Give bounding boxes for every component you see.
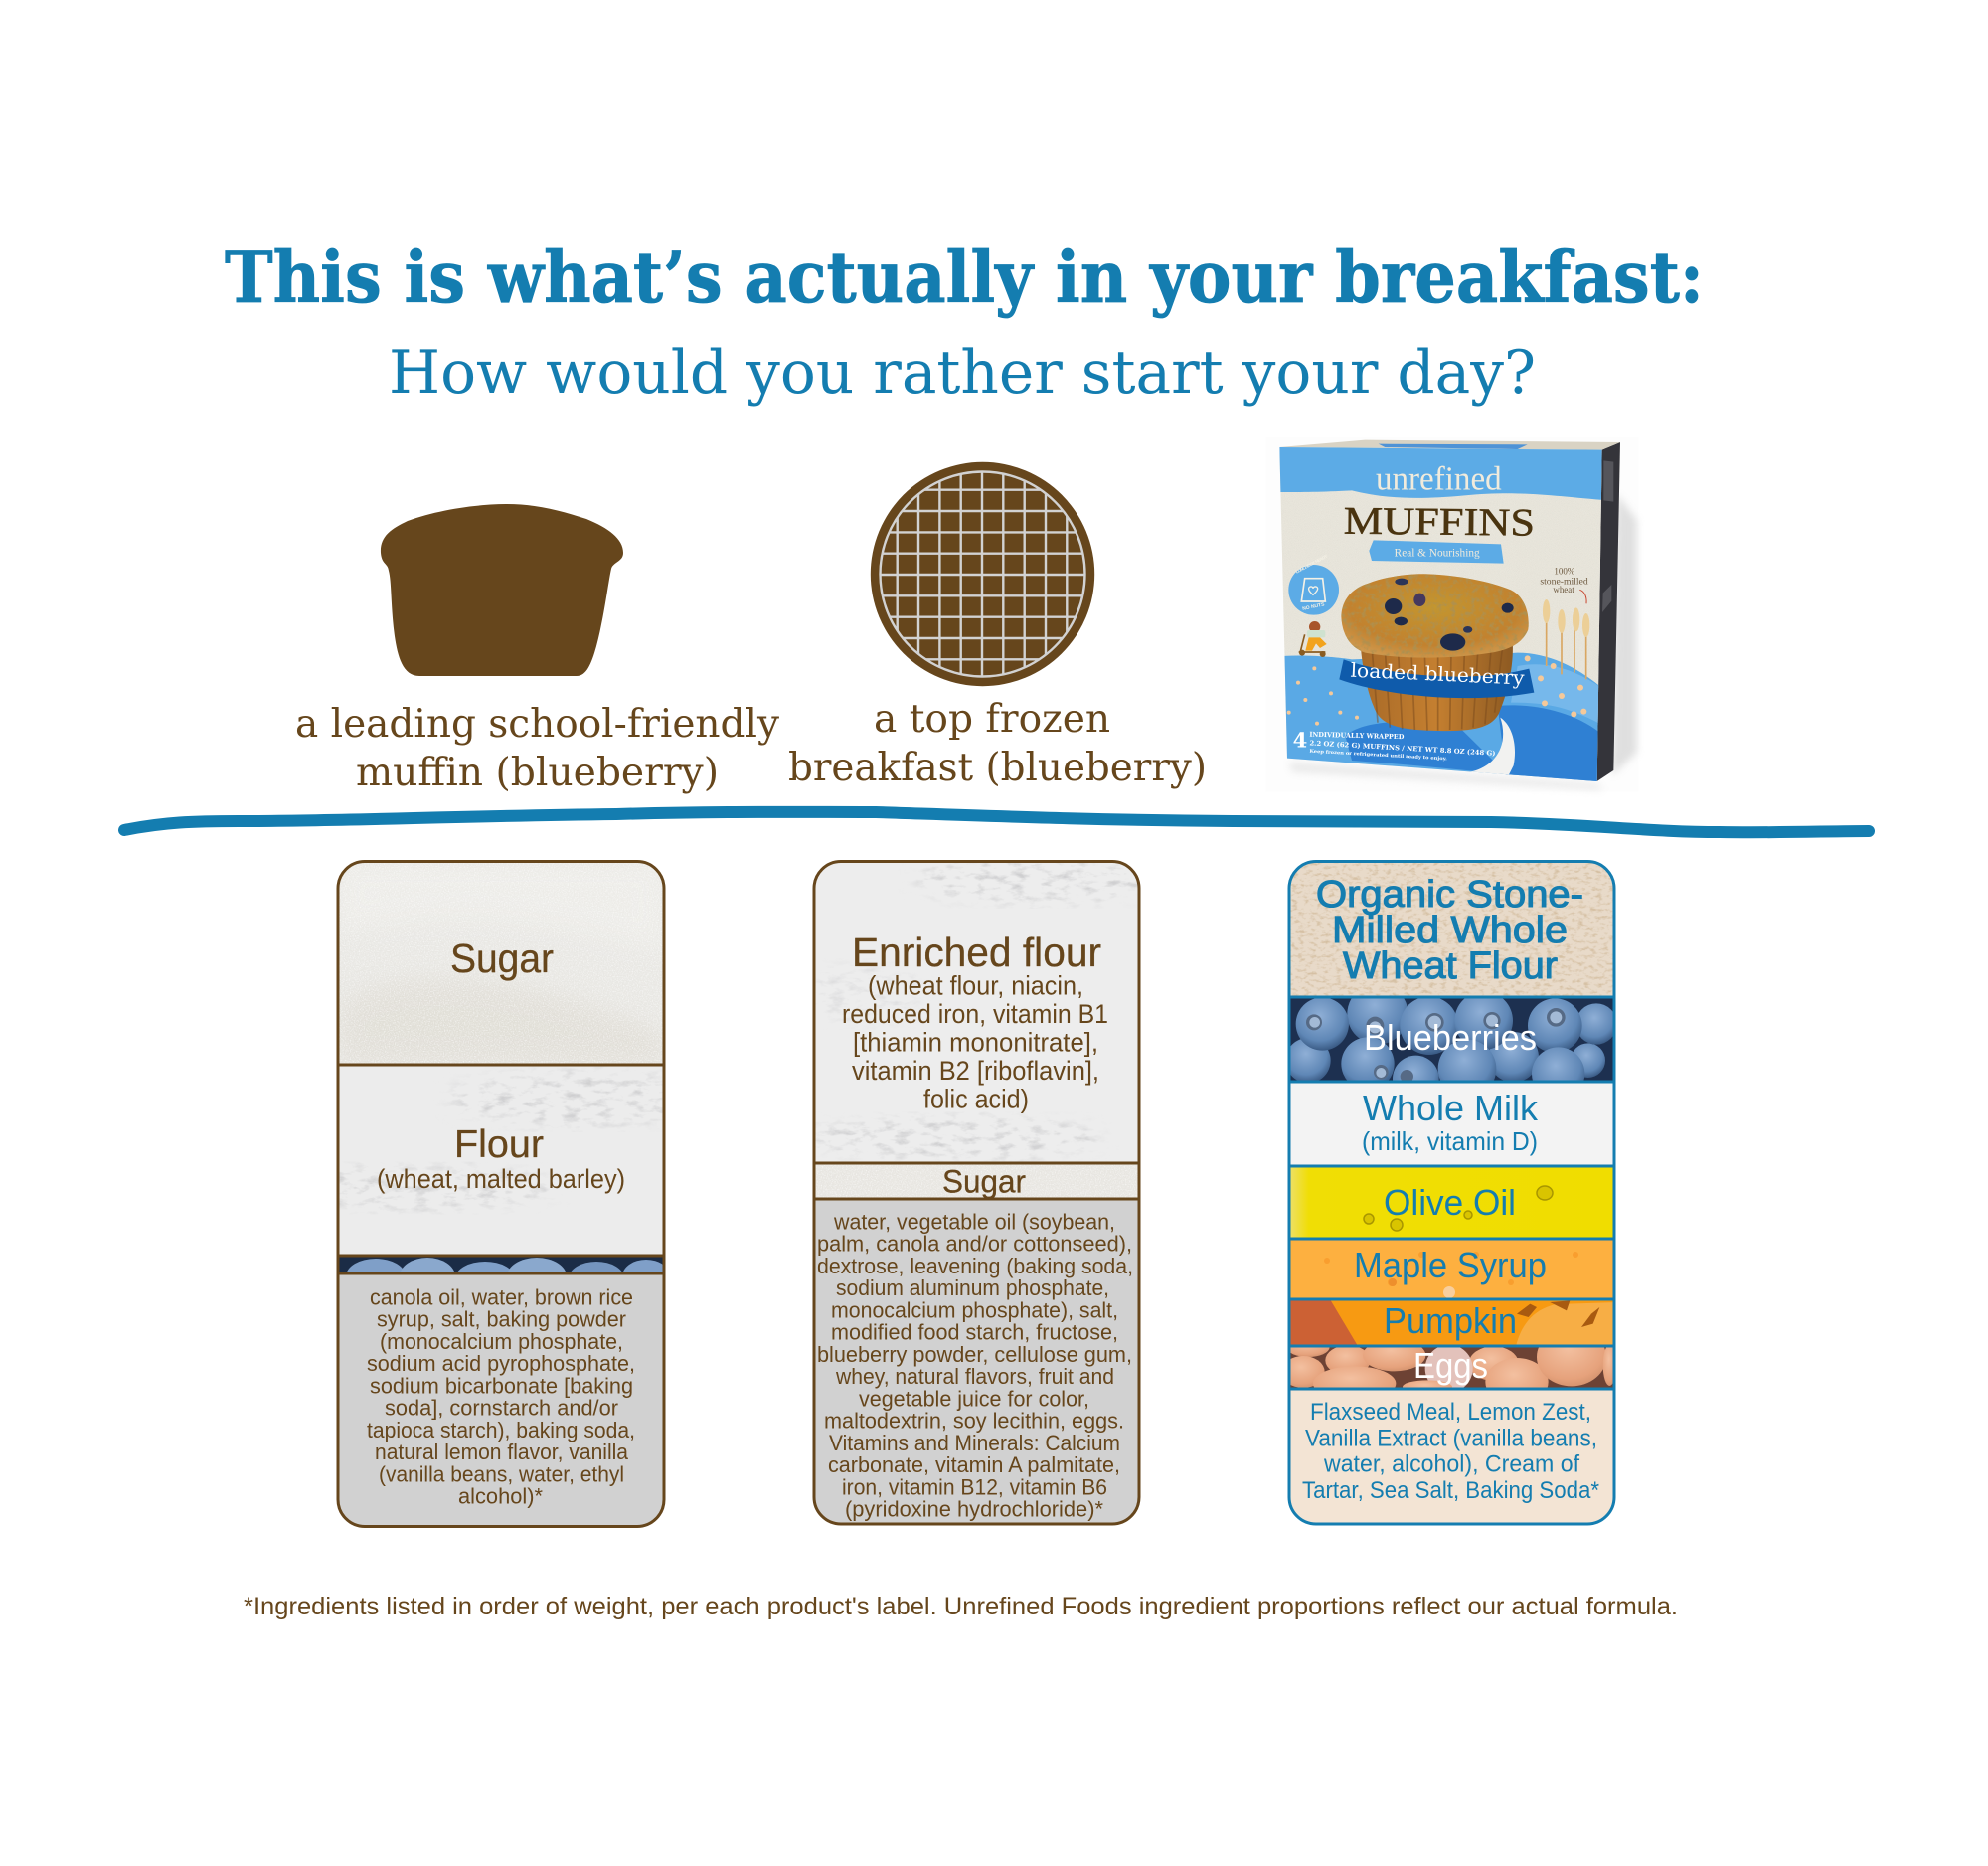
layer: other ingredients: (monocalcium phosphate, bbox=[380, 1329, 623, 1354]
layer: whole milk bbox=[1289, 1082, 1616, 1166]
layer: enriched flour: folic acid) bbox=[923, 1084, 1029, 1113]
layer: other ingredients: sodium aluminum phosphate, bbox=[836, 1275, 1109, 1300]
layer: whole wheat flour: Organic Stone- bbox=[1316, 874, 1583, 916]
layer: other ingredients: vegetable juice for color, bbox=[859, 1386, 1089, 1411]
layer: other ingredients: Flaxseed Meal, Lemon Zest, bbox=[1310, 1399, 1591, 1426]
box pack size text: 2.2 OZ (62 G) MUFFINS / NET WT 8.8 OZ (248 G) bbox=[1309, 739, 1496, 758]
layer: whole wheat flour: Wheat Flour bbox=[1343, 945, 1558, 987]
product box: unrefined muffins bbox=[1265, 437, 1638, 792]
layer: other ingredients: modified food starch, fructose, bbox=[831, 1320, 1118, 1345]
layer: other ingredients: tapioca starch), baking soda, bbox=[367, 1418, 635, 1442]
panel: frozen breakfast ingredients bbox=[805, 856, 1153, 1529]
box badge: lunchbox ready bbox=[1288, 553, 1339, 615]
panel: leading muffin ingredients bbox=[336, 860, 666, 1528]
layer: sugar bbox=[338, 861, 665, 1065]
layer: enriched flour: Enriched flour bbox=[852, 930, 1101, 975]
layer: flour bbox=[340, 1066, 662, 1255]
layer: other ingredients: carbonate, vitamin A palmitate, bbox=[828, 1452, 1120, 1477]
icon: muffin silhouette bbox=[381, 504, 623, 676]
layer: whole wheat flour bbox=[1289, 861, 1616, 997]
box pack size text: Keep frozen or refrigerated until ready to enjoy. bbox=[1309, 749, 1447, 762]
layer: other ingredients bbox=[338, 1273, 665, 1532]
subtitle: How would you rather start your day? bbox=[389, 338, 1536, 408]
layer: other ingredients bbox=[814, 1199, 1141, 1529]
layer: whole milk: Whole Milk bbox=[1363, 1088, 1539, 1128]
layer: maple syrup bbox=[1289, 1239, 1616, 1299]
box badge: lunchbox ready: LUNCHBOX READY bbox=[1295, 553, 1328, 575]
layer: other ingredients: alcohol)* bbox=[458, 1483, 543, 1509]
label: frozen breakfast: breakfast (blueberry) bbox=[788, 746, 1207, 790]
layer: enriched flour bbox=[805, 856, 1153, 1163]
box pack size text: 4 bbox=[1293, 729, 1307, 753]
label: frozen breakfast: a top frozen bbox=[874, 697, 1110, 742]
layer: other ingredients: Vitamins and Minerals: Calcium bbox=[829, 1431, 1120, 1455]
box brand name: unrefined bbox=[1376, 461, 1502, 498]
layer: eggs: Eggs bbox=[1413, 1345, 1488, 1386]
layer: other ingredients: palm, canola and/or cottonseed), bbox=[817, 1232, 1132, 1257]
layer: other ingredients bbox=[1289, 1389, 1616, 1528]
layer: other ingredients: dextrose, leavening (baking soda, bbox=[817, 1254, 1133, 1278]
layer: other ingredients: water, vegetable oil (soybean, bbox=[833, 1209, 1115, 1234]
label: frozen breakfast bbox=[788, 697, 1207, 790]
layer: other ingredients: (vanilla beans, water, ethyl bbox=[379, 1461, 624, 1486]
panel: unrefined muffin ingredients bbox=[1281, 861, 1617, 1528]
layer: other ingredients: maltodextrin, soy lecithin, eggs. bbox=[824, 1409, 1124, 1434]
box band: loaded blueberry: loaded blueberry bbox=[1350, 659, 1525, 690]
layer: other ingredients: sodium bicarbonate [baking bbox=[370, 1373, 633, 1398]
layer: blueberries bbox=[1290, 998, 1612, 1080]
layer: enriched flour: vitamin B2 [riboflavin], bbox=[852, 1056, 1099, 1086]
box band: loaded blueberry bbox=[1339, 659, 1534, 698]
dark blue water bbox=[1345, 722, 1508, 774]
layer: flour: (wheat, malted barley) bbox=[377, 1164, 625, 1194]
box callout: stone-milled wheat: stone-milled bbox=[1540, 576, 1588, 586]
box illustration: child on scooter bbox=[1299, 621, 1327, 657]
layer: other ingredients: Tartar, Sea Salt, Baking Soda* bbox=[1302, 1477, 1599, 1504]
box scattered wheat marks bbox=[1287, 655, 1586, 726]
lower hills bbox=[1282, 653, 1603, 788]
icon: waffle bbox=[865, 457, 1098, 691]
layer: other ingredients: water, alcohol), Cream of bbox=[1323, 1451, 1579, 1478]
layer: blueberries strip bbox=[340, 1257, 662, 1272]
box badge: lunchbox ready: NO NUTS bbox=[1302, 601, 1326, 612]
layer: other ingredients: blueberry powder, cellulose gum, bbox=[817, 1342, 1132, 1367]
label: school-friendly muffin: a leading school-friendly bbox=[295, 702, 779, 747]
layer: sugar: Sugar bbox=[942, 1164, 1026, 1200]
wavy divider bbox=[124, 812, 1869, 832]
box pack size text bbox=[1293, 729, 1496, 762]
box heading: MUFFINS bbox=[1344, 499, 1535, 545]
layer: other ingredients: syrup, salt, baking powder bbox=[377, 1306, 626, 1332]
layer: other ingredients: sodium acid pyrophosphate, bbox=[367, 1351, 635, 1376]
box pack size text: INDIVIDUALLY WRAPPED bbox=[1309, 731, 1405, 741]
layer: other ingredients: canola oil, water, brown rice bbox=[370, 1284, 633, 1309]
layer: other ingredients: soda], cornstarch and/or bbox=[385, 1396, 618, 1420]
label: school-friendly muffin bbox=[295, 702, 779, 795]
layer: enriched flour: reduced iron, vitamin B1 bbox=[842, 999, 1108, 1029]
box callout: stone-milled wheat bbox=[1540, 567, 1589, 679]
layer: other ingredients: whey, natural flavors, fruit and bbox=[835, 1364, 1114, 1389]
layer: other ingredients: natural lemon flavor, vanilla bbox=[375, 1440, 629, 1464]
label: school-friendly muffin: muffin (blueberry) bbox=[356, 751, 719, 795]
layer: olive oil bbox=[1289, 1166, 1616, 1239]
layer: enriched flour: (wheat flour, niacin, bbox=[868, 970, 1083, 1000]
box ribbon bbox=[1369, 540, 1504, 564]
layer: pumpkin: Pumpkin bbox=[1384, 1300, 1517, 1341]
layer: sugar bbox=[815, 1165, 1137, 1197]
box callout: stone-milled wheat: wheat bbox=[1553, 585, 1574, 594]
layer: flour: Flour bbox=[454, 1123, 544, 1166]
layer: whole milk: (milk, vitamin D) bbox=[1362, 1126, 1538, 1156]
milk swoosh bbox=[1470, 718, 1515, 775]
layer: blueberries: Blueberries bbox=[1364, 1017, 1537, 1058]
layer: other ingredients: monocalcium phosphate), salt, bbox=[831, 1297, 1118, 1322]
title: This is what’s actually in your breakfast: bbox=[225, 235, 1704, 319]
layer: other ingredients: (pyridoxine hydrochloride)* bbox=[845, 1497, 1103, 1522]
layer: other ingredients: Vanilla Extract (vanilla beans, bbox=[1305, 1425, 1597, 1451]
layer: maple syrup: Maple Syrup bbox=[1354, 1245, 1547, 1285]
layer: enriched flour: [thiamin mononitrate], bbox=[853, 1028, 1098, 1058]
layer: eggs bbox=[1290, 1348, 1612, 1388]
box top blue band bbox=[1275, 444, 1607, 500]
layer: other ingredients: iron, vitamin B12, vitamin B6 bbox=[842, 1474, 1107, 1499]
box callout: stone-milled wheat: 100% bbox=[1554, 567, 1575, 577]
layer: whole wheat flour: Milled Whole bbox=[1332, 910, 1568, 951]
layer: olive oil: Olive Oil bbox=[1384, 1182, 1516, 1223]
box photo: muffin bbox=[1341, 574, 1529, 731]
layer: sugar: Sugar bbox=[450, 935, 554, 981]
footnote: *Ingredients listed in order of weight, per each product's label. Unrefined Foods ingredient proportions reflect our actual formula. bbox=[244, 1593, 1678, 1620]
layer: pumpkin bbox=[1289, 1299, 1616, 1346]
box ribbon: Real & Nourishing bbox=[1395, 545, 1480, 559]
